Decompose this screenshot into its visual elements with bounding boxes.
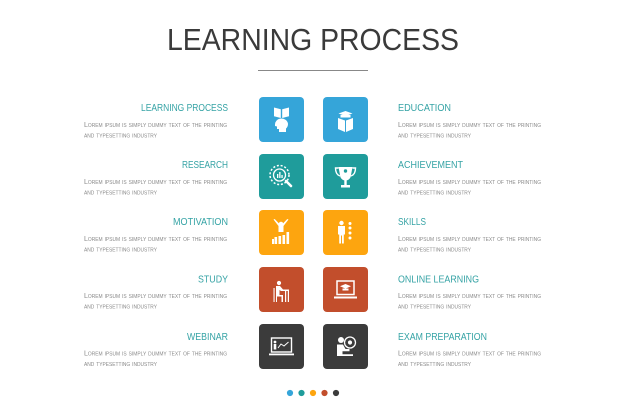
text block: study (84, 274, 228, 310)
icon: exam preparation person and clock (323, 324, 368, 369)
text block: education: EDUCATION (398, 103, 451, 114)
icon: webinar laptop (259, 324, 304, 369)
text block: exam preparation: and typesetting industry (398, 359, 472, 368)
text block: skills: Lorem ipsum is simply dummy text of the printing (398, 234, 541, 243)
icon: head with book (259, 97, 304, 142)
text block: achievement: Lorem ipsum is simply dummy text of the printing (398, 177, 541, 186)
text block: achievement (398, 160, 541, 196)
text block: research (84, 160, 228, 196)
text block: learning process (84, 103, 228, 140)
icon: skills person with dots (323, 210, 368, 255)
text block: achievement: and typesetting industry (398, 188, 472, 196)
text block: online learning (398, 274, 541, 310)
icon: magnifier research (259, 154, 304, 199)
text block: webinar: Lorem ipsum is simply dummy text of the printing (84, 348, 227, 358)
text block: webinar (84, 332, 228, 368)
text block: motivation (84, 217, 228, 254)
text block: skills: and typesetting industry (398, 244, 472, 254)
text block: online learning: and typesetting industry (398, 302, 472, 310)
text block: exam preparation: EXAM PREPARATION (398, 332, 487, 343)
text block: exam preparation: Lorem ipsum is simply dummy text of the printing (398, 348, 541, 358)
text block: education: and typesetting industry (398, 130, 472, 140)
text block: motivation: Lorem ipsum is simply dummy text of the printing (84, 234, 227, 243)
icon: motivation person on bars (259, 210, 304, 255)
title: LEARNING PROCESS (167, 22, 459, 57)
text block: skills (398, 217, 541, 254)
text block: study: Lorem ipsum is simply dummy text of the printing (84, 291, 227, 300)
pagination dots (287, 390, 339, 396)
text block: webinar: WEBINAR (187, 332, 228, 343)
text block: webinar: and typesetting industry (84, 359, 158, 368)
text block: online learning: Lorem ipsum is simply dummy text of the printing (398, 291, 541, 300)
text block: exam preparation (398, 332, 541, 368)
text block: achievement: ACHIEVEMENT (398, 160, 463, 171)
text block: learning process: Lorem ipsum is simply dummy text of the printing (84, 120, 227, 129)
text block: research: RESEARCH (182, 160, 228, 171)
icon: laptop with graduation cap (323, 267, 368, 312)
icon: student at desk (259, 267, 304, 312)
text block: education: Lorem ipsum is simply dummy text of the printing (398, 120, 541, 129)
text block: online learning: ONLINE LEARNING (398, 274, 479, 286)
text block: motivation: MOTIVATION (173, 217, 228, 228)
text block: skills: SKILLS (398, 217, 426, 228)
text block: study: STUDY (198, 274, 228, 286)
text block: research: and typesetting industry (84, 188, 158, 196)
text block: education (398, 103, 541, 140)
text block: learning process: and typesetting industry (84, 130, 158, 140)
text block: motivation: and typesetting industry (84, 244, 158, 254)
text block: study: and typesetting industry (84, 302, 158, 310)
icon: trophy (323, 154, 368, 199)
text block: research: Lorem ipsum is simply dummy text of the printing (84, 177, 227, 186)
icon: book with graduation cap (323, 97, 368, 142)
text block: learning process: LEARNING PROCESS (141, 103, 228, 114)
